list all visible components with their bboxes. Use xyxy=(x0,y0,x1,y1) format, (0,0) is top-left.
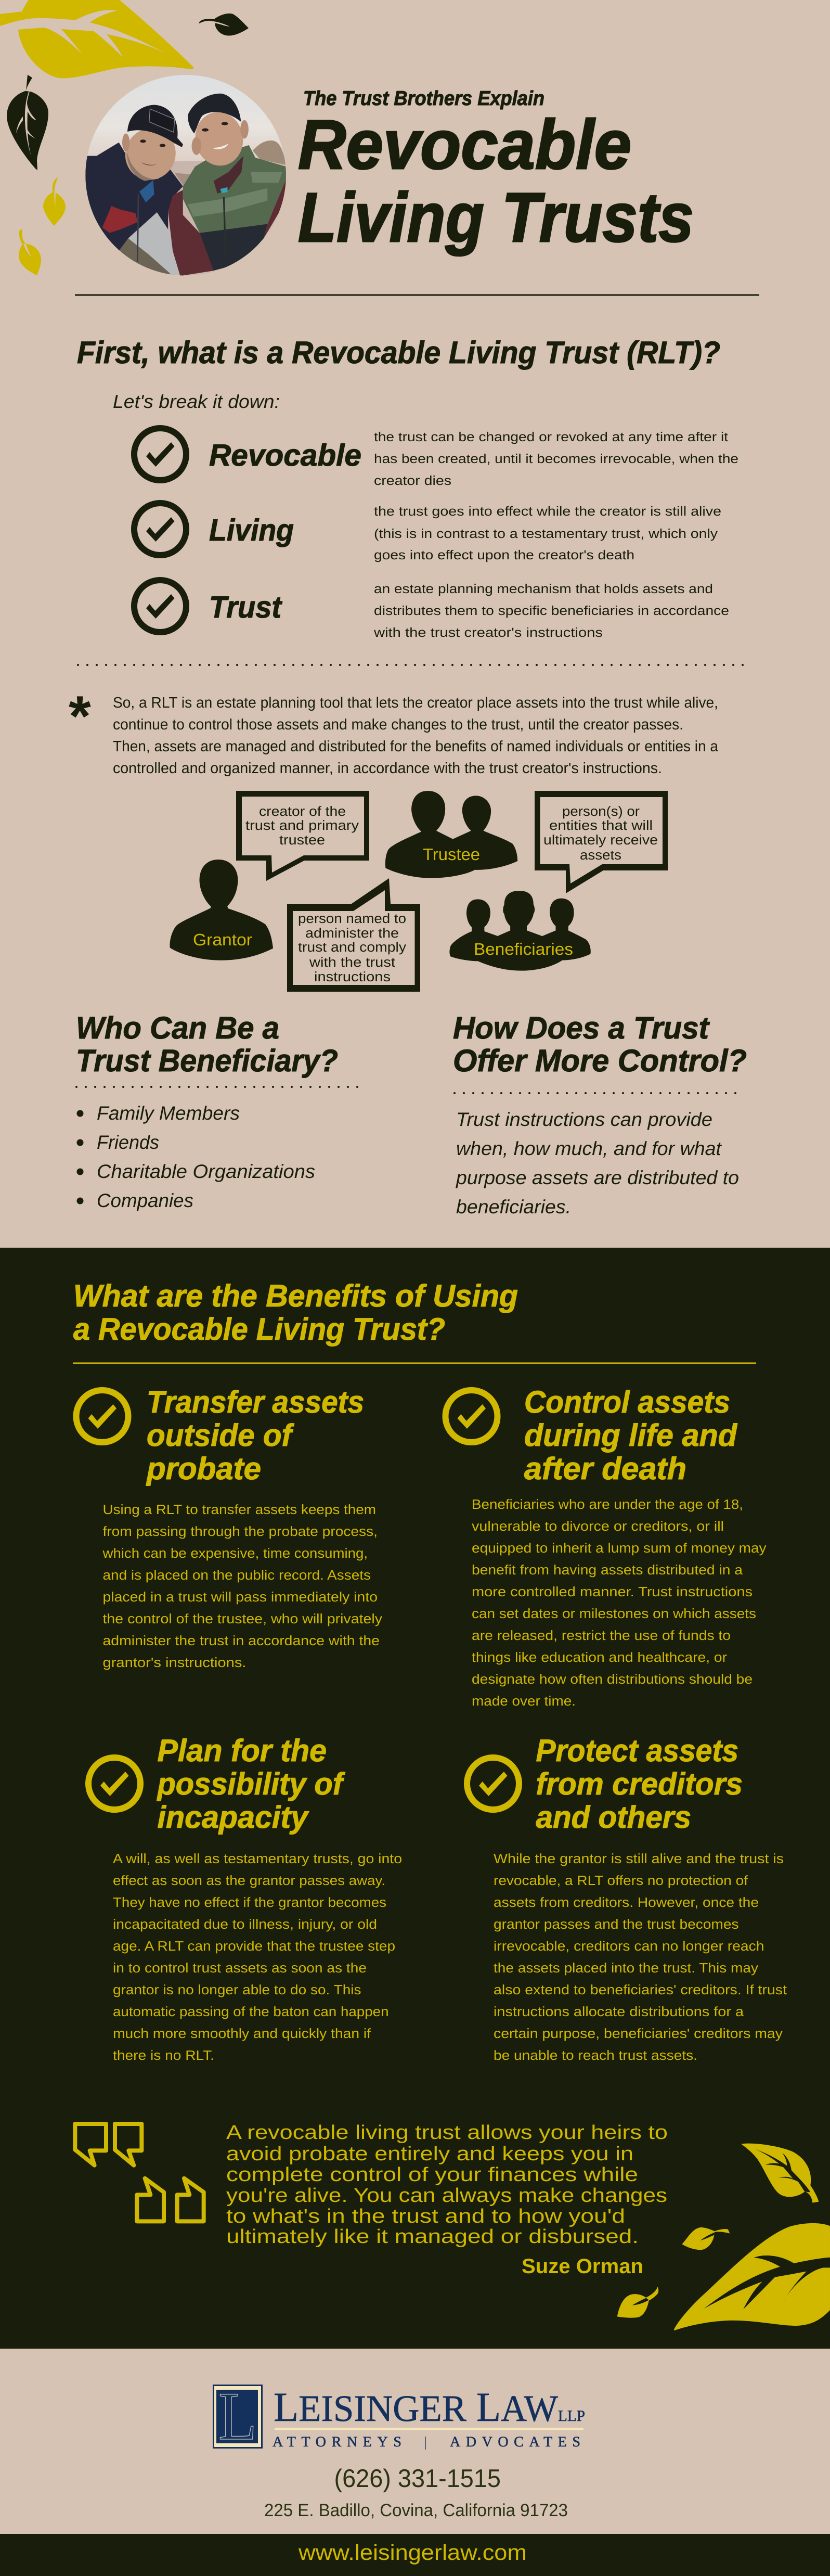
benefit: plan for incapacity xyxy=(88,1733,402,2063)
callout: trustee description: person named to xyxy=(298,911,406,926)
panel: how a trust offers control xyxy=(453,1010,747,1217)
heading xyxy=(73,1278,518,1347)
body text: when, how much, and for what xyxy=(456,1138,722,1159)
benefit body xyxy=(494,1851,787,2063)
logo: Leisinger Law: LLP xyxy=(558,2407,585,2425)
logo: Leisinger Law: LAW xyxy=(476,2385,558,2430)
quote attribution: Suze Orman xyxy=(522,2255,643,2278)
definition xyxy=(373,582,729,640)
heading: a Revocable Living Trust? xyxy=(73,1312,445,1347)
benefit body: which can be expensive, time consuming, xyxy=(102,1545,368,1561)
benefit body: equipped to inherit a lump sum of money may xyxy=(472,1540,767,1556)
benefit heading xyxy=(146,1385,364,1486)
benefit heading: Protect assets xyxy=(536,1733,738,1768)
website url: www.leisingerlaw.com xyxy=(298,2540,527,2565)
callout: quote xyxy=(75,2122,668,2278)
intro text: Let's break it down: xyxy=(113,391,280,412)
quote text: you're alive. You can always make changes xyxy=(226,2185,667,2207)
benefit body xyxy=(472,1496,767,1709)
title: Living Trusts xyxy=(298,179,694,257)
icon: check circle xyxy=(134,503,186,555)
quote text: A revocable living trust allows your heirs to xyxy=(226,2122,668,2144)
icon: asterisk: * xyxy=(69,684,91,748)
benefit body: revocable, a RLT offers no protection of xyxy=(494,1873,748,1888)
benefit body: instructions allocate distributions for a xyxy=(494,2004,744,2019)
callout: beneficiaries description: entities that will xyxy=(549,817,653,833)
callout: trustee description: instructions xyxy=(314,969,391,984)
row: revocable xyxy=(134,428,738,488)
icon: check circle xyxy=(76,1390,128,1442)
benefit body: grantor is no longer able to do so. This xyxy=(113,1982,361,1997)
benefit heading: outside of xyxy=(147,1418,294,1453)
benefit body: grantor passes and the trust becomes xyxy=(494,1916,738,1932)
benefit body: can set dates or milestones on which assets xyxy=(472,1606,756,1621)
callout: beneficiaries description: person(s) or xyxy=(562,803,640,819)
definition: an estate planning mechanism that holds assets and xyxy=(374,582,713,596)
benefit heading xyxy=(536,1733,743,1835)
benefit body: also extend to beneficiaries' creditors. If trust xyxy=(494,1982,787,1997)
benefit body: and is placed on the public record. Assets xyxy=(103,1567,371,1583)
benefit body: certain purpose, beneficiaries' creditors may xyxy=(494,2026,783,2041)
benefit body: While the grantor is still alive and the trust is xyxy=(494,1851,784,1866)
benefit body: are released, restrict the use of funds to xyxy=(472,1627,731,1643)
benefit body: They have no effect if the grantor becomes xyxy=(113,1894,386,1910)
benefit body: the control of the trustee, who will privately xyxy=(103,1611,382,1626)
phone number: (626) 331-1515 xyxy=(334,2465,501,2493)
icon: yellow leaf lower xyxy=(19,229,41,275)
benefit body: the assets placed into the trust. This may xyxy=(494,1960,758,1976)
body text: purpose assets are distributed to xyxy=(456,1167,739,1188)
benefit body: assets from creditors. However, once the xyxy=(494,1894,759,1910)
icon: quotation marks xyxy=(75,2124,204,2221)
definition: with the trust creator's instructions xyxy=(373,625,603,640)
benefit body: administer the trust in accordance with the xyxy=(103,1633,380,1648)
benefit body: in to control trust assets as soon as the xyxy=(113,1960,367,1976)
benefit body: incapacitated due to illness, injury, or old xyxy=(113,1916,377,1932)
address: 225 E. Badillo, Covina, California 91723 xyxy=(264,2501,568,2520)
benefit body: irrevocable, creditors can no longer reach xyxy=(494,1938,764,1954)
benefit body: benefit from having assets distributed in a xyxy=(472,1562,743,1578)
benefit heading: Plan for the xyxy=(157,1733,327,1768)
benefit body: automatic passing of the baton can happen xyxy=(113,2004,389,2019)
panel: header xyxy=(0,0,694,277)
callout: grantor description: creator of the xyxy=(259,803,346,819)
benefit body: Using a RLT to transfer assets keeps them xyxy=(103,1502,376,1517)
figure: beneficiaries xyxy=(449,891,591,971)
photo: the Trust Brothers xyxy=(84,73,288,277)
term: Trust xyxy=(209,590,282,624)
panel: benefits xyxy=(0,1248,830,2349)
body text xyxy=(456,1109,739,1217)
body text: beneficiaries. xyxy=(456,1196,571,1217)
icon: check circle xyxy=(88,1758,140,1810)
benefit: transfer assets xyxy=(76,1385,382,1670)
diagram: trust parties xyxy=(170,791,668,992)
figure: grantor xyxy=(170,860,273,960)
icon: small dark leaf xyxy=(199,14,249,36)
benefit heading xyxy=(157,1733,345,1835)
benefit heading: during life and xyxy=(524,1418,737,1453)
benefit body: made over time. xyxy=(472,1693,576,1709)
heading xyxy=(76,1010,338,1078)
benefit body: placed in a trust will pass immediately into xyxy=(103,1589,378,1605)
definition: creator dies xyxy=(374,473,451,488)
benefit heading: possibility of xyxy=(157,1766,345,1801)
logo: Leisinger Law: ADVOCATES xyxy=(450,2434,580,2450)
figure: trustee: Trustee xyxy=(423,845,480,864)
icon: yellow leaf middle xyxy=(43,177,66,226)
definition: the trust goes into effect while the creator is still alive xyxy=(374,504,721,519)
definition xyxy=(374,504,721,562)
benefit: control assets xyxy=(445,1385,767,1709)
heading: Who Can Be a xyxy=(76,1010,279,1045)
benefit heading xyxy=(524,1385,737,1486)
title xyxy=(298,106,694,257)
benefit body: things like education and healthcare, or xyxy=(472,1649,727,1665)
benefit body: A will, as well as testamentary trusts, go into xyxy=(113,1851,402,1866)
callout: trustee description xyxy=(287,878,420,992)
heading: Offer More Control? xyxy=(453,1043,747,1078)
callout: beneficiaries description: ultimately receive xyxy=(543,832,658,848)
logo: Leisinger Law: ATTORNEYS xyxy=(273,2434,401,2450)
definition xyxy=(374,430,738,488)
callout: grantor description xyxy=(236,791,369,881)
benefit heading: Transfer assets xyxy=(147,1385,364,1419)
benefit body: more controlled manner. Trust instructions xyxy=(472,1584,753,1599)
figure: grantor: Grantor xyxy=(193,930,252,949)
callout: beneficiaries description xyxy=(535,791,668,893)
definition: distributes them to specific beneficiaries in accordance xyxy=(374,604,729,618)
subtitle: The Trust Brothers Explain xyxy=(303,87,544,110)
benefit heading: and others xyxy=(536,1800,691,1835)
icon: check circle xyxy=(467,1758,519,1810)
callout: grantor description: trustee xyxy=(279,832,325,848)
bullet list xyxy=(77,1103,315,1211)
summary paragraph: Then, assets are managed and distributed for the benefits of named individuals or entities in a xyxy=(113,738,719,755)
panel: who can be a beneficiary xyxy=(76,1010,358,1211)
benefit heading: Control assets xyxy=(524,1385,730,1419)
benefit body: effect as soon as the grantor passes away. xyxy=(113,1873,385,1888)
quote text: avoid probate entirely and keeps you in xyxy=(226,2143,633,2165)
bullet list: Companies xyxy=(97,1190,193,1211)
bullet list: Friends xyxy=(97,1132,159,1153)
callout: trustee description: administer the xyxy=(305,925,399,941)
panel: footer xyxy=(213,2378,585,2520)
figure: beneficiaries: Beneficiaries xyxy=(474,940,573,958)
heading: How Does a Trust xyxy=(453,1010,710,1045)
logo: Leisinger Law xyxy=(213,2378,585,2454)
body text: Trust instructions can provide xyxy=(456,1109,712,1130)
benefit body: there is no RLT. xyxy=(113,2047,214,2063)
figure: trustee xyxy=(385,791,517,878)
benefit heading: after death xyxy=(524,1451,686,1486)
quote text: ultimately like it managed or disbursed. xyxy=(226,2226,639,2248)
heading xyxy=(453,1010,747,1078)
heading: Trust Beneficiary? xyxy=(76,1043,338,1078)
quote text xyxy=(226,2122,668,2248)
logo: Leisinger Law: LEISINGER xyxy=(274,2385,466,2430)
heading: First, what is a Revocable Living Trust (RLT)? xyxy=(77,335,720,370)
callout: trustee description: trust and comply xyxy=(298,939,406,955)
icon: check circle xyxy=(134,428,186,480)
icon: leaf cluster xyxy=(617,2144,830,2330)
bullet list: Charitable Organizations xyxy=(97,1161,315,1182)
benefit body: age. A RLT can provide that the trustee step xyxy=(113,1938,395,1954)
icon: large yellow leaf xyxy=(0,0,193,78)
heading: What are the Benefits of Using xyxy=(73,1278,518,1313)
benefit body: vulnerable to divorce or creditors, or ill xyxy=(472,1518,724,1534)
benefit body: grantor's instructions. xyxy=(103,1655,247,1670)
benefit: protect assets xyxy=(467,1733,787,2063)
benefit heading: incapacity xyxy=(157,1800,309,1835)
quote text: to what's in the trust and to how you'd xyxy=(226,2206,625,2227)
panel: website bar xyxy=(0,2534,830,2576)
panel: what is an RLT xyxy=(69,335,745,777)
summary paragraph: controlled and organized manner, in accordance with the trust creator's instructions. xyxy=(113,760,662,777)
benefit body xyxy=(102,1502,382,1670)
icon: tall dark leaf xyxy=(7,75,48,170)
callout: trustee description: with the trust xyxy=(309,954,396,970)
callout: grantor description: trust and primary xyxy=(245,817,359,833)
definition: (this is in contrast to a testamentary trust, which only xyxy=(374,527,718,541)
quote text: complete control of your finances while xyxy=(226,2164,638,2186)
benefit body: designate how often distributions should be xyxy=(472,1671,753,1687)
summary paragraph xyxy=(113,695,719,777)
icon: check circle xyxy=(445,1390,497,1442)
definition: the trust can be changed or revoked at any time after it xyxy=(374,430,728,444)
icon: check circle xyxy=(134,580,186,632)
callout: beneficiaries description: assets xyxy=(580,847,621,863)
term: Living xyxy=(209,513,294,547)
row: living xyxy=(134,503,721,562)
summary paragraph: So, a RLT is an estate planning tool that lets the creator place assets into the trust while alive, xyxy=(113,695,718,711)
benefit body: be unable to reach trust assets. xyxy=(494,2047,697,2063)
benefit heading: probate xyxy=(146,1451,261,1486)
definition: has been created, until it becomes irrevocable, when the xyxy=(374,452,738,466)
benefit body: much more smoothly and quickly than if xyxy=(113,2026,371,2041)
term: Revocable xyxy=(209,438,361,472)
bullet list: Family Members xyxy=(97,1103,240,1124)
summary paragraph: continue to control those assets and make changes to the trust, until the creator passes. xyxy=(113,716,683,733)
benefit body: Beneficiaries who are under the age of 18, xyxy=(472,1496,743,1512)
title: Revocable xyxy=(298,106,631,184)
definition: goes into effect upon the creator's death xyxy=(374,548,634,562)
row: trust xyxy=(134,580,729,640)
benefit body xyxy=(113,1851,402,2063)
logo: Leisinger Law: L xyxy=(218,2378,257,2454)
benefit heading: from creditors xyxy=(536,1766,743,1801)
benefit body: from passing through the probate process, xyxy=(103,1523,378,1539)
